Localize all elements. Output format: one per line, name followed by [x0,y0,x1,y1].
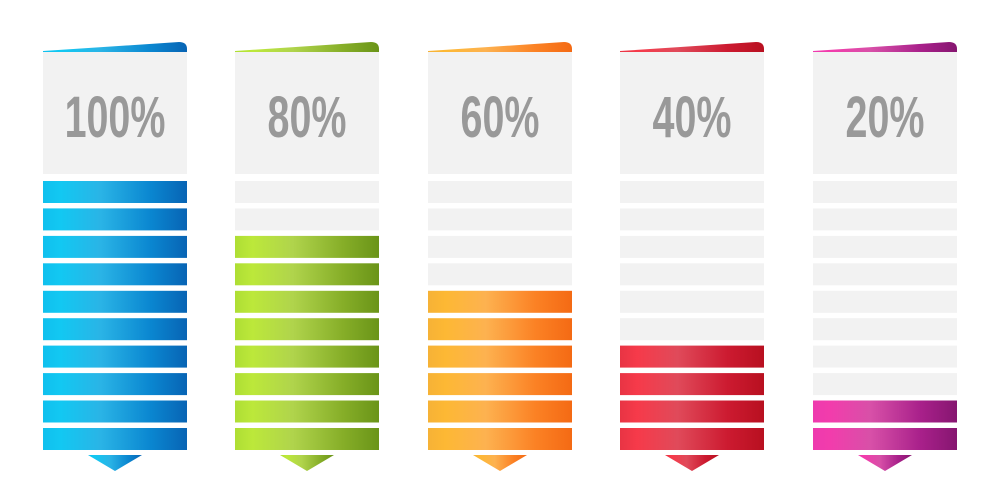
header box [428,52,572,174]
percent label: 40% [653,84,731,150]
percent label: 20% [846,84,924,150]
column: 80% [235,42,379,471]
header box [620,52,764,174]
pointer [665,455,719,471]
column: 100% [43,42,187,471]
pointer [88,455,142,471]
percent label: 80% [268,84,346,150]
pointer [280,455,334,471]
pointer [858,455,912,471]
ribbon [235,42,379,52]
percent label: 60% [461,84,539,150]
percent label: 100% [65,84,165,150]
column: 60% [428,42,572,471]
bars [235,181,379,450]
ribbon [428,42,572,52]
header box [43,52,187,174]
header box [813,52,957,174]
ribbon [43,42,187,52]
bars [43,181,187,450]
bars [813,181,957,450]
header box [235,52,379,174]
pointer [473,455,527,471]
column: 20% [813,42,957,471]
ribbon [620,42,764,52]
bars [428,181,572,450]
ribbon [813,42,957,52]
bars [620,181,764,450]
column: 40% [620,42,764,471]
